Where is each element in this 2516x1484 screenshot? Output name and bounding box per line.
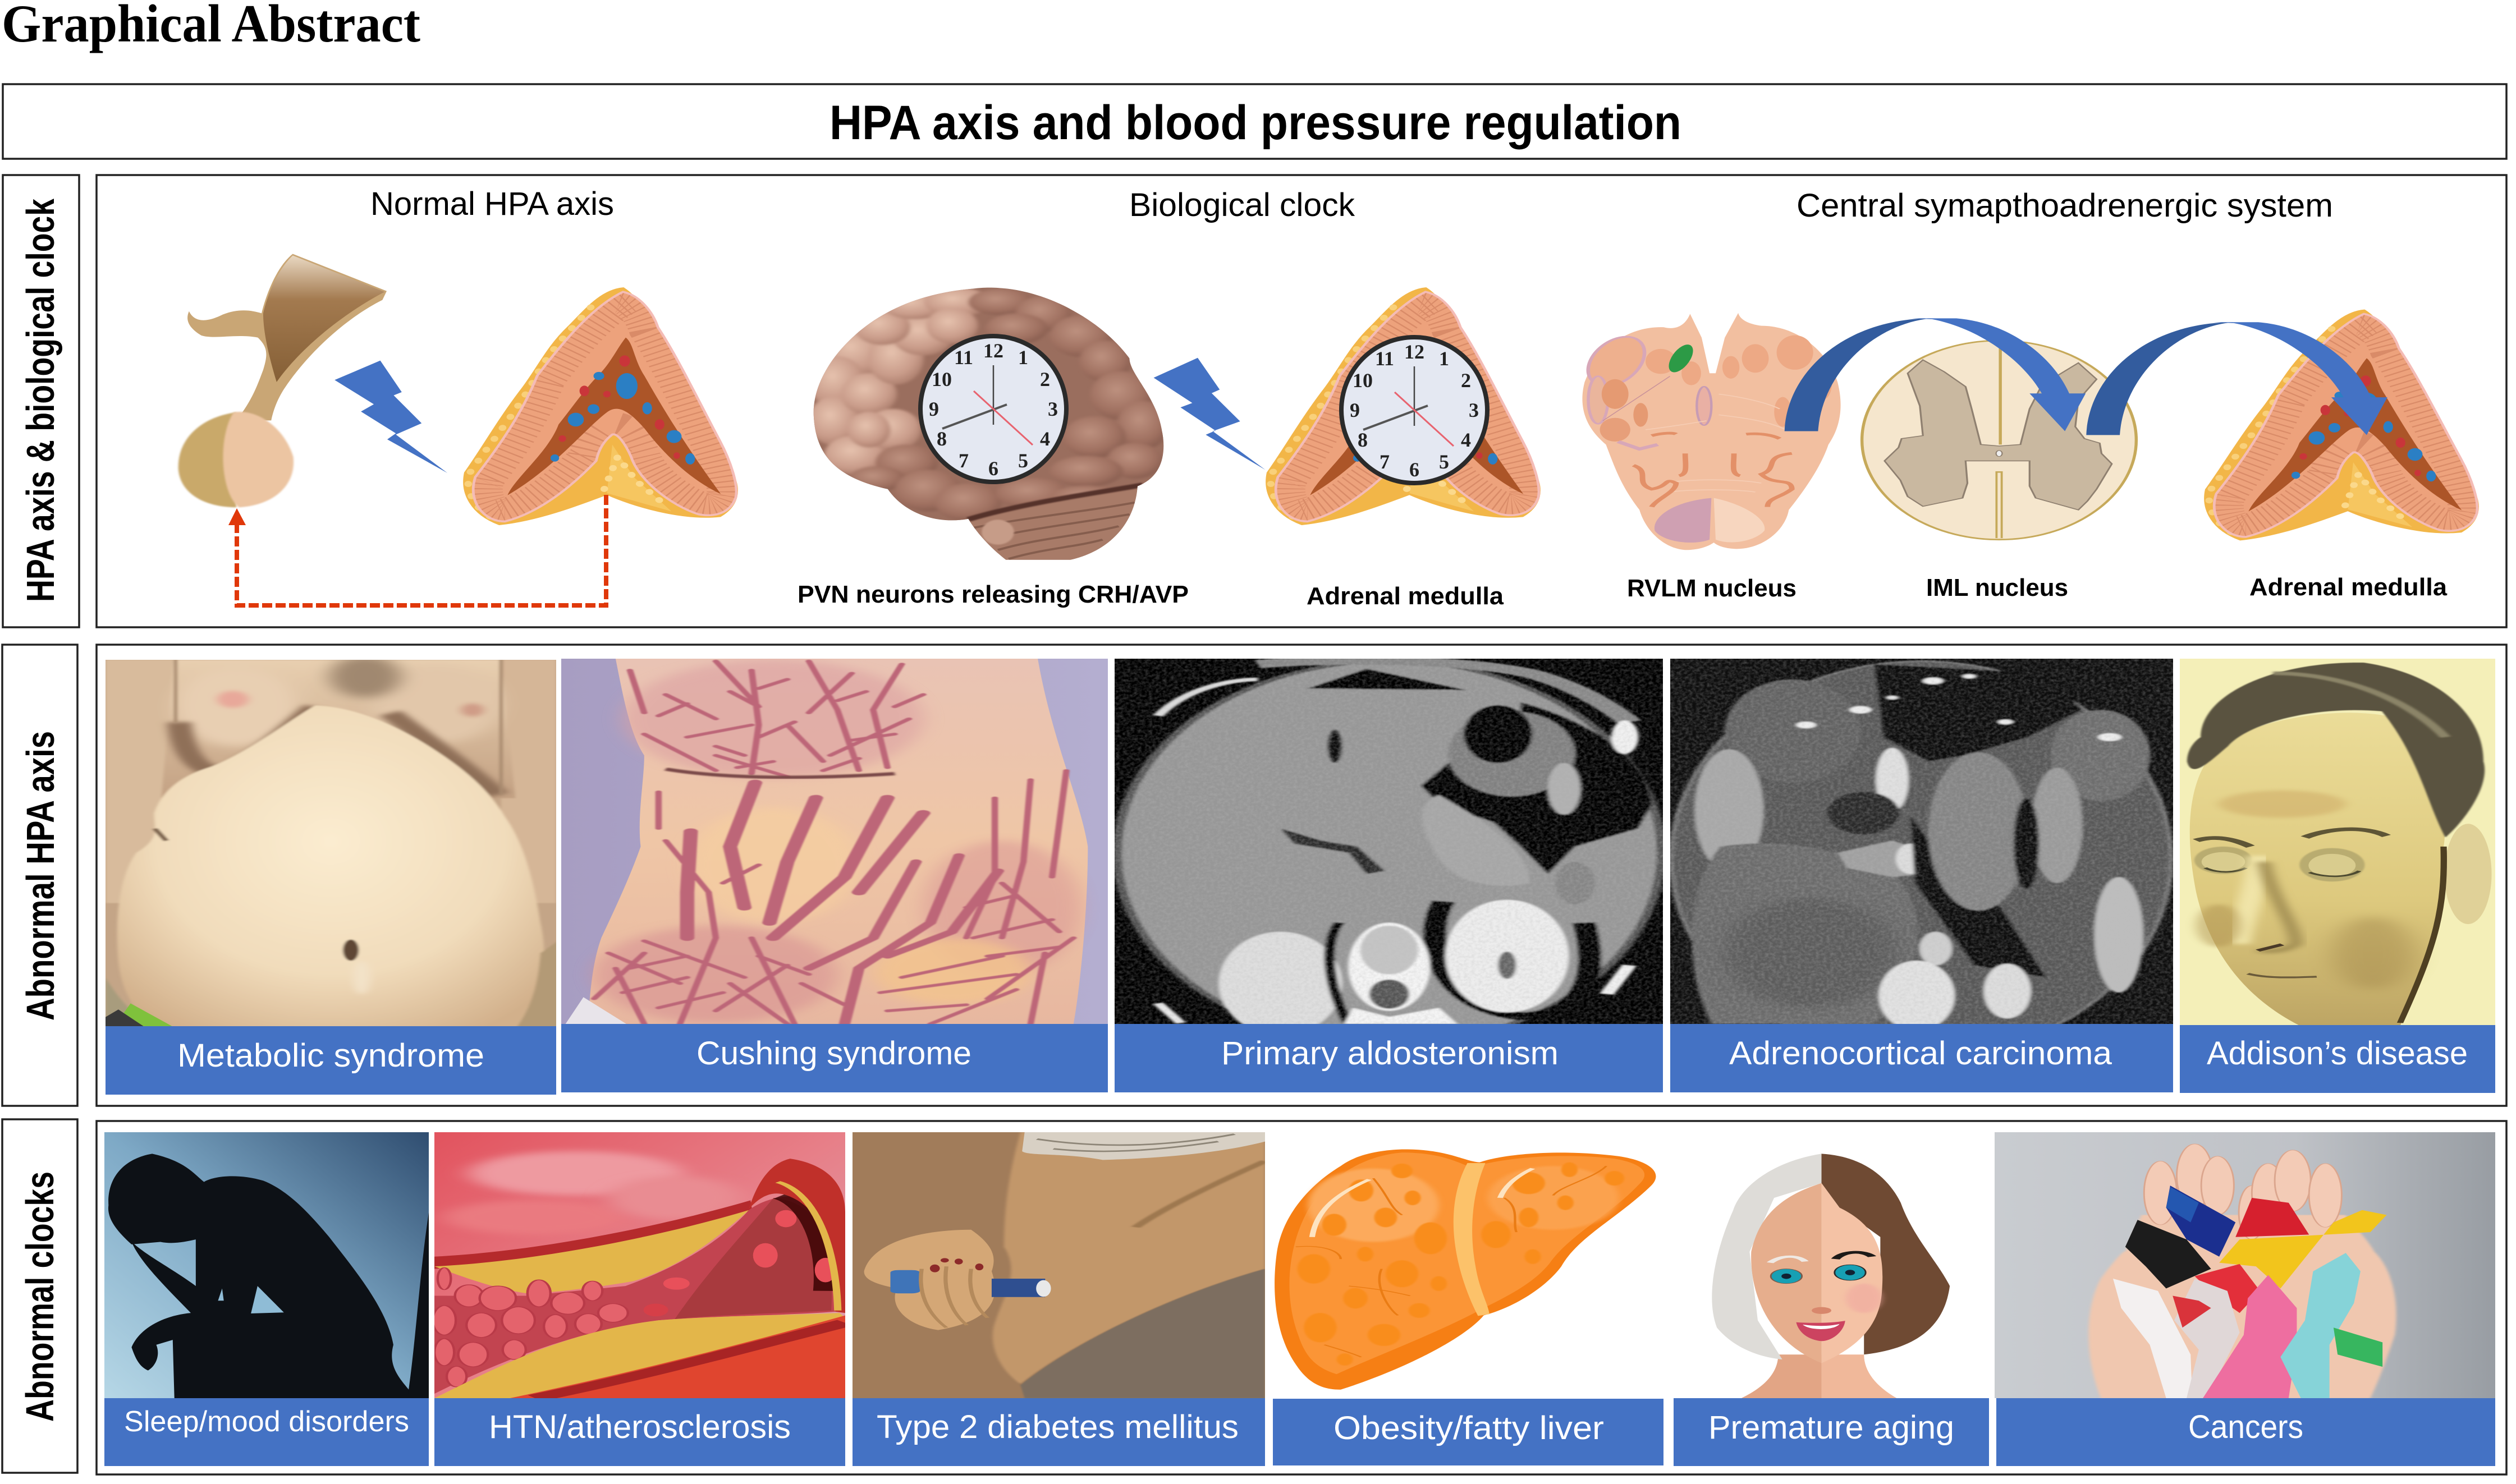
label: PVN neurons: PVN neurons releasing CRH/AVP: [798, 581, 1189, 608]
label band: Type 2 diabetes mellitus: [853, 1398, 1265, 1466]
icon: lightning bolt HPA: [334, 361, 447, 473]
card: Sleep/mood disorders: [104, 1132, 429, 1466]
icon: adrenal gland sympathoadrenergic: [2206, 311, 2477, 539]
label band: Adrenocortical carcinoma: Adrenocortical carcinoma: [1729, 1035, 2112, 1072]
side label panel: Abnormal clocks: Abnormal clocks: [18, 1171, 62, 1422]
photo: CT scan aldosteronism: [1115, 659, 1663, 1044]
icon: clock on brain: 2: [1040, 368, 1050, 390]
card: Premature aging: [1674, 1154, 1989, 1466]
arrow: IML to adrenal medulla: [2086, 322, 2387, 435]
icon: clock on adrenal: 9: [1350, 399, 1360, 421]
panel: HPA axis and biological clock diagrams: [97, 175, 2506, 627]
label band: Addison's disease: Addison’s disease: [2207, 1035, 2468, 1072]
card: Primary aldosteronism: [1115, 659, 1663, 1092]
label band: Obesity/fatty liver: [1273, 1399, 1663, 1465]
photo: insulin pen injection: [853, 1132, 1265, 1398]
photo: obese abdomen: [106, 660, 556, 1026]
label: RVLM nucleus: RVLM nucleus: [1627, 575, 1797, 602]
card: Obesity/fatty liver: [1273, 1150, 1663, 1465]
arrow: RVLM to IML: [1785, 318, 2086, 431]
icon: clock on adrenal: [1341, 337, 1487, 483]
icon: clock on brain: 4: [1040, 428, 1050, 450]
photo: face portrait: [2180, 659, 2495, 1026]
icon: clock on brain: 8: [937, 428, 947, 450]
icon: clock on adrenal: 1: [1439, 347, 1449, 370]
icon: pituitary gland: [178, 254, 387, 507]
label band: Type 2 diabetes mellitus: Type 2 diabetes mellitus: [877, 1409, 1239, 1445]
label band: Premature aging: Premature aging: [1708, 1409, 1954, 1446]
side label panel: Abnormal HPA axis: Abnormal HPA axis: [19, 731, 62, 1021]
side label panel: Abnormal clocks: [2, 1119, 77, 1473]
icon: clock on brain: 3: [1048, 398, 1058, 420]
card: Metabolic syndrome: [106, 655, 562, 1095]
label band: Adrenocortical carcinoma: [1670, 1024, 2173, 1092]
label band: Premature aging: [1674, 1398, 1989, 1466]
icon: medulla oblongata section: [1578, 313, 1841, 550]
heading: Normal HPA axis: Normal HPA axis: [370, 186, 614, 222]
icon: clock on brain: 12: [983, 339, 1003, 362]
icon: clock on brain: 6: [988, 457, 998, 480]
label band: Cancers: [1996, 1398, 2495, 1466]
label: Adrenal medulla: Adrenal medulla: [1307, 582, 1504, 610]
icon: clock on adrenal: 7: [1380, 451, 1390, 473]
heading panel: HPA axis and blood pressure regulation: [3, 84, 2506, 159]
heading: Central sympathoadrenergic system: Central symapthoadrenergic system: [1797, 187, 2333, 224]
icon: clock on brain: 11: [954, 346, 973, 369]
icon: clock on brain: 1: [1018, 346, 1028, 369]
label band: HTN/atherosclerosis: HTN/atherosclerosis: [489, 1409, 791, 1445]
photo: abdominal striae: [561, 659, 1108, 1024]
side label panel: Abnormal HPA axis: [2, 645, 77, 1106]
icon: clock on adrenal: 6: [1409, 458, 1419, 481]
card: Adrenocortical carcinoma: [1670, 659, 2173, 1092]
card: Cushing syndrome: [561, 659, 1108, 1092]
label band: Sleep/mood disorders: [104, 1398, 429, 1466]
label band: Cancers: Cancers: [2188, 1409, 2303, 1445]
label: Adrenal medulla right: Adrenal medulla: [2249, 573, 2448, 601]
icon: clock on adrenal: 2: [1461, 369, 1471, 392]
arrow: dashed feedback: [228, 495, 606, 605]
photo: hands holding awareness ribbons: [1995, 1132, 2495, 1398]
side label panel: HPA axis and biological clock: [3, 175, 79, 627]
icon: clock on adrenal: 12: [1404, 341, 1424, 363]
label band: Primary aldosteronism: Primary aldosteronism: [1221, 1035, 1559, 1072]
icon: clock on brain: 9: [929, 398, 939, 420]
label band: Obesity/fatty liver: Obesity/fatty liver: [1333, 1410, 1604, 1446]
icon: clock on adrenal: 3: [1469, 399, 1479, 421]
icon: clock on adrenal: 5: [1439, 451, 1449, 473]
icon: clock on brain: 5: [1018, 449, 1028, 472]
icon: adrenal gland with clock: [1268, 289, 1539, 523]
label band: Metabolic syndrome: [106, 1026, 556, 1095]
photo: artery with plaque: [433, 1132, 845, 1398]
photo: silhouette of distressed person: [104, 1132, 429, 1398]
icon: adrenal gland: [465, 289, 736, 523]
illustration: fatty liver: [1275, 1150, 1656, 1390]
icon: lightning bolt clock: [1154, 358, 1266, 470]
card: HTN/atherosclerosis: [433, 1132, 845, 1466]
icon: brain: [808, 288, 1168, 563]
photo: CT scan carcinoma: [1670, 659, 2173, 1056]
card: Addison's disease: [2180, 659, 2495, 1093]
icon: clock on brain: 10: [932, 368, 952, 390]
icon: clock on adrenal: 10: [1353, 369, 1373, 392]
illustration: half aged woman face: [1712, 1154, 1950, 1398]
icon: clock on adrenal: 4: [1461, 429, 1471, 451]
label band: Cushing syndrome: Cushing syndrome: [696, 1035, 971, 1072]
icon: spinal cord section: [1862, 341, 2136, 540]
label band: Primary aldosteronism: [1115, 1024, 1663, 1092]
label: IML nucleus: IML nucleus: [1926, 574, 2068, 601]
icon: clock on brain: [920, 336, 1066, 482]
label band: Metabolic syndrome: Metabolic syndrome: [177, 1037, 484, 1074]
heading text: HPA axis and blood pressure regulation: [829, 96, 1681, 150]
panel: Abnormal clocks conditions: [97, 1121, 2506, 1474]
panel: Abnormal HPA axis conditions: [97, 645, 2506, 1106]
icon: clock on adrenal: 11: [1375, 347, 1394, 370]
card: Cancers: [1995, 1132, 2495, 1466]
label band: Addison's disease: [2180, 1025, 2495, 1093]
icon: clock on adrenal: 8: [1358, 429, 1368, 451]
side label panel: HPA axis and biological clock: HPA axis & biological clock: [19, 199, 62, 602]
card: Type 2 diabetes mellitus: [853, 1132, 1265, 1466]
label band: Cushing syndrome: [561, 1024, 1108, 1092]
icon: clock on brain: 7: [959, 449, 969, 472]
label band: Sleep/mood disorders: Sleep/mood disorders: [124, 1405, 409, 1438]
label band: HTN/atherosclerosis: [434, 1398, 845, 1466]
heading: Biological clock: Biological clock: [1129, 187, 1355, 223]
